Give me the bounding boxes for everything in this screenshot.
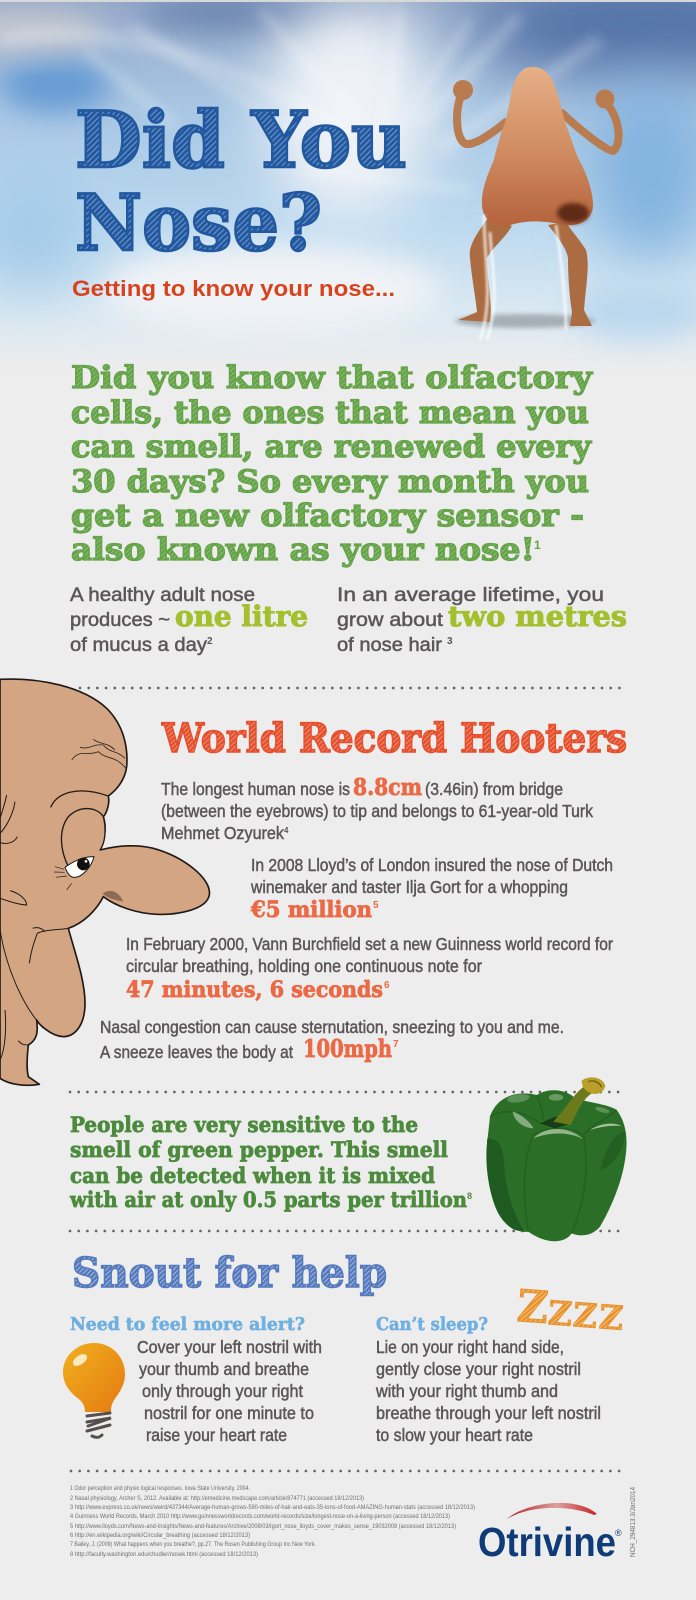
nose character body xyxy=(482,67,593,226)
footnotes: 7 Bailey, J. (2009) What happens when you breathe?, pp.27. The Rosen Publishing Group Inc New York. xyxy=(70,1541,316,1548)
intro fact paragraph: 30 days? So every month you xyxy=(71,464,589,500)
record: longest nose: (between the eyebrows) to tip and belongs to 61-year-old Turk xyxy=(161,801,593,821)
footnotes: 8 http://faculty.washington.edu/chudler/nosek.html (accessed 18/12/2013) xyxy=(70,1551,258,1558)
fact: one litre of mucus: of mucus a day xyxy=(70,634,207,656)
record: longest nose: The longest human nose is xyxy=(161,779,350,799)
footnotes: 2 Nasal physiology, Archer S, 2012. Available at: http://emedicine.medscape.com/article/874771 (accessed 18/12/2013) xyxy=(70,1495,364,1502)
fact: one litre of mucus: 2 xyxy=(207,636,213,647)
tip: feel more alert: raise your heart rate xyxy=(146,1425,287,1445)
fact: two metres of nose hair xyxy=(337,584,627,656)
fact: one litre of mucus: A healthy adult nose xyxy=(70,584,255,606)
nose character legs xyxy=(458,218,592,326)
other facial lines xyxy=(0,795,68,1077)
fact: one litre of mucus: one litre xyxy=(175,600,308,633)
record: longest nose: Mehmet Ozyurek xyxy=(161,823,284,843)
icon: Zzzz: Z xyxy=(515,1281,550,1334)
title xyxy=(75,95,407,269)
heading: World Record Hooters: World Record Hooters xyxy=(161,715,627,762)
footnotes: 6 http://en.wikipedia.org/wiki/Circular_breathing (accessed 18/12/2013) xyxy=(70,1532,250,1539)
footnotes: 5 http://www.lloyds.com/News-and-Insights/News-and-features/Archive/2008/03/Igort_nose_lloyds_cover_makes_sense_19032008 (accessed 18/12/2013) xyxy=(70,1523,456,1530)
record: sneeze speed: Nasal congestion can cause sternutation, sneezing to you and me. xyxy=(100,1017,564,1037)
fact: two metres of nose hair: In an average lifetime, you xyxy=(337,584,604,606)
fact: one litre of mucus xyxy=(70,584,308,656)
tip: feel more alert: only through your right xyxy=(142,1381,303,1401)
title: Nose? xyxy=(75,178,322,269)
footnotes: 1 Odor perception and physio logical responses. Iowa State University, 2004. xyxy=(70,1485,250,1492)
fact: two metres of nose hair: of nose hair xyxy=(337,634,443,656)
logo: Otrivine: Otrivine xyxy=(478,1519,616,1565)
record: circular breathing: 6 xyxy=(384,980,390,991)
record: sneeze speed: A sneeze leaves the body at xyxy=(100,1042,293,1062)
record: sneeze speed xyxy=(100,1017,564,1063)
record: longest nose xyxy=(161,774,593,843)
tip: can't sleep: to slow your heart rate xyxy=(376,1425,533,1445)
subtitle: Getting to know your nose... xyxy=(72,276,395,301)
record: insured nose: 5 xyxy=(373,900,379,911)
green pepper fact: can be detected when it is mixed xyxy=(70,1164,435,1189)
tip: feel more alert: Cover your left nostril with xyxy=(137,1337,322,1357)
record: longest nose: 4 xyxy=(284,826,289,835)
green pepper fact: smell of green pepper. This smell xyxy=(70,1138,448,1163)
title: Did You xyxy=(75,95,407,186)
record: insured nose xyxy=(250,855,613,923)
record: insured nose: In 2008 Lloyd’s of London insured the nose of Dutch xyxy=(251,855,613,875)
tip: can't sleep: breathe through your left nostril xyxy=(376,1403,601,1423)
intro fact paragraph xyxy=(71,360,593,568)
job code: NCH_294813.3/Jan2014 xyxy=(628,1487,637,1557)
intro fact paragraph: can smell, are renewed every xyxy=(71,429,592,465)
record: insured nose: winemaker and taster Ilja Gort for a whopping xyxy=(250,877,568,897)
green pepper fact: People are very sensitive to the xyxy=(70,1113,418,1138)
tip: feel more alert: Need to feel more alert? xyxy=(70,1314,305,1335)
footnotes: 3 http://www.express.co.uk/news/weird/437344/Average-human-grows-590-miles-of-hair-and-eats-35-tons-of-food-AMAZING-human-stats (accessed 18/12/2013) xyxy=(70,1504,475,1511)
tip: feel more alert xyxy=(70,1314,322,1445)
icon: Zzzz: Z xyxy=(547,1293,573,1334)
icon: green pepper xyxy=(486,1077,627,1241)
record: circular breathing xyxy=(126,934,613,1003)
cartoon eye xyxy=(51,791,108,890)
record: sneeze speed: 100mph xyxy=(303,1034,392,1063)
icon: light bulb xyxy=(63,1343,125,1437)
nostril xyxy=(103,891,123,902)
tip: can't sleep: gently close your right nostril xyxy=(376,1359,581,1379)
tip: feel more alert: nostril for one minute to xyxy=(144,1403,314,1423)
icon: Zzzz: Z xyxy=(572,1295,598,1336)
tip: can't sleep: Can’t sleep? xyxy=(376,1314,488,1335)
green pepper fact: 8 xyxy=(467,1191,472,1201)
intro fact paragraph: cells, the ones that mean you xyxy=(71,395,589,431)
intro fact paragraph: get a new olfactory sensor - xyxy=(71,498,584,534)
fact: one litre of mucus: produces ~ xyxy=(70,609,170,631)
icon: Zzzz xyxy=(515,1281,624,1338)
fact: two metres of nose hair: 3 xyxy=(447,636,453,647)
record: circular breathing: In February 2000, Vann Burchfield set a new Guinness world record for xyxy=(126,934,613,954)
sky banner xyxy=(0,0,696,375)
nose character xyxy=(453,67,619,340)
forehead wrinkles xyxy=(72,739,126,768)
fact: two metres of nose hair: grow about xyxy=(337,609,444,631)
record: longest nose: (3.46in) from bridge xyxy=(425,779,563,799)
heading: Snout for help: Snout for help xyxy=(72,1249,387,1297)
tip: can't sleep: Lie on your right hand side, xyxy=(376,1337,564,1357)
record: circular breathing: circular breathing, holding one continuous note for xyxy=(126,956,482,976)
air wisps xyxy=(480,215,566,340)
nose character arms xyxy=(457,98,619,151)
record: circular breathing: 47 minutes, 6 seconds xyxy=(126,977,383,1003)
logo: Otrivine: ® xyxy=(615,1528,622,1538)
icon: Zzzz: Z xyxy=(598,1297,624,1338)
tip: can't sleep: with your right thumb and xyxy=(375,1381,558,1401)
footnotes xyxy=(70,1485,475,1558)
tip: feel more alert: your thumb and breathe xyxy=(139,1359,309,1379)
intro fact paragraph: also known as your nose! xyxy=(71,532,535,568)
record: longest nose: 8.8cm xyxy=(353,774,422,801)
footnotes: 4 Guinness World Records, March 2010 http://www.guinnessworldrecords.com/world-records/size/longest-nose-on-a-living-person (accessed 18/12/2013) xyxy=(70,1513,450,1520)
cartoon head illustration xyxy=(0,679,209,1085)
record: insured nose: €5 million xyxy=(250,897,372,923)
green pepper fact xyxy=(69,1113,472,1213)
record: sneeze speed: 7 xyxy=(393,1039,399,1050)
tip: can't sleep xyxy=(375,1314,601,1445)
fact: two metres of nose hair: two metres xyxy=(448,600,627,633)
intro fact paragraph: Did you know that olfactory xyxy=(71,360,593,396)
green pepper fact: with air at only 0.5 parts per trillion xyxy=(69,1188,467,1213)
intro fact paragraph: 1 xyxy=(534,538,541,552)
